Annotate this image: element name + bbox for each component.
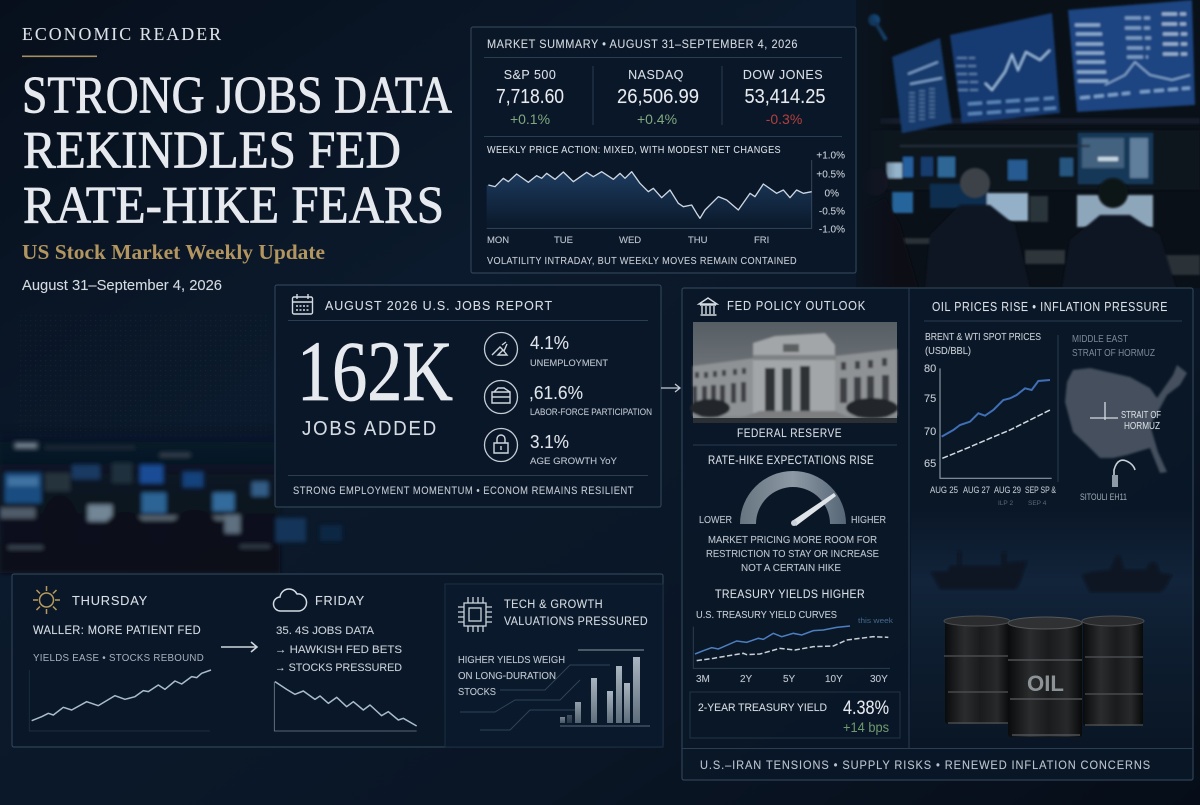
ship silhouettes bbox=[931, 551, 1172, 592]
title block bbox=[22, 24, 452, 294]
treasury x-axis labels: 2Y bbox=[740, 674, 753, 685]
tech note bbox=[458, 654, 565, 698]
big number: 162K jobs added bbox=[297, 323, 453, 440]
chart x-axis labels: FRI bbox=[754, 235, 769, 246]
index: S&P 500: +0.1% bbox=[510, 111, 550, 127]
tech heading: VALUATIONS PRESSURED bbox=[504, 616, 648, 628]
index: Dow Jones: DOW JONES bbox=[743, 68, 823, 82]
gauge: rate-hike expectations: LOWER bbox=[699, 515, 732, 526]
headline bbox=[22, 66, 452, 234]
stat: unemployment bbox=[484, 332, 608, 369]
callout: 2-year treasury yield: 4.38% bbox=[843, 698, 889, 719]
background: world map texture bbox=[20, 315, 270, 440]
oil y-axis labels: 70 bbox=[924, 426, 936, 438]
line chart: weekly price action bbox=[487, 160, 812, 228]
market pricing note: NOT A CERTAIN HIKE bbox=[741, 562, 841, 574]
treasury x-axis labels bbox=[696, 674, 888, 685]
index: S&P 500 bbox=[496, 68, 564, 127]
chart y-axis labels bbox=[816, 150, 845, 236]
oil barrels bbox=[944, 616, 1144, 737]
date: August 31–September 4, 2026 bbox=[22, 277, 222, 294]
map: strait of hormuz bbox=[1065, 365, 1187, 502]
circuit lines bbox=[460, 665, 610, 730]
arrow: jobs to fed bbox=[661, 384, 680, 392]
bar chart: tech valuations bbox=[560, 650, 650, 726]
panel: thursday, friday and tech bbox=[12, 574, 663, 747]
panel: jobs report bbox=[275, 285, 661, 507]
background: trading floor photo, upper right bbox=[856, 0, 1200, 288]
tech heading bbox=[504, 599, 648, 628]
market pricing note: MARKET PRICING MORE ROOM FOR bbox=[708, 534, 877, 546]
treasury x-axis labels: 10Y bbox=[825, 674, 843, 685]
map title: MIDDLE EAST bbox=[1072, 333, 1128, 345]
tech heading: TECH & GROWTH bbox=[504, 599, 603, 611]
panel: fed and oil outer frame bbox=[682, 288, 1193, 780]
callout: 2-year treasury yield bbox=[690, 692, 900, 738]
oil x-axis labels: AUG 29 bbox=[994, 485, 1021, 496]
oil heading: OIL PRICES RISE • INFLATION PRESSURE bbox=[932, 300, 1168, 314]
friday notes: → STOCKS PRESSURED bbox=[275, 662, 402, 674]
gauge: rate-hike expectations: HIGHER bbox=[851, 515, 886, 526]
panel: fed policy outlook bbox=[690, 298, 900, 738]
index: Dow Jones bbox=[743, 68, 826, 127]
friday heading: FRIDAY bbox=[315, 593, 365, 608]
stat: wage growth: AGE GROWTH YoY bbox=[530, 456, 618, 467]
map: strait of hormuz: SITOULI EH11 bbox=[1080, 492, 1127, 502]
chart y-axis labels: 0% bbox=[825, 188, 839, 200]
market pricing note: RESTRICTION TO STAY OR INCREASE bbox=[706, 548, 879, 560]
index: NASDAQ: +0.4% bbox=[637, 111, 677, 127]
thursday note: YIELDS EASE • STOCKS REBOUND bbox=[33, 652, 204, 664]
oil x-axis labels: ILP 2 bbox=[998, 500, 1013, 507]
market summary heading: MARKET SUMMARY • AUGUST 31–SEPTEMBER 4, 2026 bbox=[487, 37, 798, 51]
fed heading: FED POLICY OUTLOOK bbox=[727, 298, 866, 313]
friday notes: 35. 4S JOBS DATA bbox=[276, 625, 375, 637]
line chart: treasury yield curves bbox=[693, 626, 890, 668]
chart y-axis labels: +0.5% bbox=[816, 170, 845, 180]
subtitle: US Stock Market Weekly Update bbox=[22, 240, 325, 264]
oil chart title: BRENT & WTI SPOT PRICES bbox=[925, 331, 1041, 343]
thursday heading: THURSDAY bbox=[72, 593, 148, 608]
oil y-axis labels bbox=[924, 363, 936, 470]
index: NASDAQ bbox=[617, 68, 699, 127]
oil x-axis labels: AUG 27 bbox=[963, 485, 990, 496]
oil x-axis labels: AUG 25 bbox=[930, 485, 958, 496]
market pricing note bbox=[706, 534, 879, 574]
treasury heading: TREASURY YIELDS HIGHER bbox=[715, 589, 865, 601]
gauge: rate-hike expectations bbox=[699, 471, 886, 526]
treasury chart title: U.S. TREASURY YIELD CURVES bbox=[696, 609, 837, 621]
map title bbox=[1072, 333, 1155, 359]
tech note: STOCKS bbox=[458, 686, 496, 698]
stat: wage growth: 3.1% bbox=[530, 432, 569, 452]
oil chart title: (USD/BBL) bbox=[925, 345, 971, 357]
icon: sun bbox=[33, 586, 60, 614]
index: S&P 500: 7,718.60 bbox=[496, 86, 564, 108]
big number: 162K jobs added: 162K bbox=[297, 323, 453, 419]
stat: unemployment: UNEMPLOYMENT bbox=[530, 358, 608, 369]
oil barrels: OIL bbox=[1027, 671, 1064, 696]
stat: unemployment: 4.1% bbox=[530, 333, 569, 353]
panel: tech and growth bbox=[445, 584, 663, 747]
stat: labor-force participation bbox=[484, 380, 652, 418]
icon: federal building bbox=[699, 298, 717, 315]
chart y-axis labels: -1.0% bbox=[819, 224, 845, 236]
callout: 2-year treasury yield: +14 bps bbox=[843, 720, 889, 735]
oil x-axis labels: SEP 4 bbox=[1028, 500, 1047, 507]
friday notes: → HAWKISH FED BETS bbox=[275, 644, 402, 656]
arrow: thursday to friday bbox=[221, 642, 257, 652]
line chart: friday decline bbox=[274, 682, 417, 731]
chart x-axis labels: TUE bbox=[554, 235, 573, 246]
index: Dow Jones: 53,414.25 bbox=[744, 86, 826, 108]
legend: this week: this week bbox=[858, 616, 893, 625]
oil y-axis labels: 80 bbox=[924, 363, 936, 375]
outlook footer: U.S.–IRAN TENSIONS • SUPPLY RISKS • RENEWED INFLATION CONCERNS bbox=[700, 758, 1151, 772]
big number: 162K jobs added: JOBS ADDED bbox=[302, 418, 438, 440]
friday notes bbox=[275, 625, 402, 674]
callout: 2-year treasury yield: 2-YEAR TREASURY YIELD bbox=[698, 702, 827, 714]
jobs report heading: AUGUST 2026 U.S. JOBS REPORT bbox=[325, 298, 553, 313]
headline: STRONG JOBS DATA bbox=[22, 66, 452, 124]
chart y-axis labels: +1.0% bbox=[816, 150, 845, 162]
chart y-axis labels: -0.5% bbox=[819, 206, 845, 218]
rate-hike heading: RATE-HIKE EXPECTATIONS RISE bbox=[708, 455, 874, 467]
tech note: ON LONG-DURATION bbox=[458, 670, 556, 682]
index: NASDAQ: NASDAQ bbox=[628, 68, 684, 82]
photo: federal reserve building bbox=[690, 322, 898, 423]
brand label: ECONOMIC READER bbox=[22, 24, 223, 44]
index: Dow Jones: -0.3% bbox=[766, 111, 802, 127]
chart x-axis labels: MON bbox=[487, 235, 509, 246]
treasury x-axis labels: 3M bbox=[696, 674, 710, 685]
stat: wage growth bbox=[484, 428, 618, 467]
stat: labor-force participation: LABOR-FORCE PARTICIPATION bbox=[530, 407, 652, 418]
index: S&P 500: S&P 500 bbox=[504, 68, 556, 82]
chart x-axis labels: WED bbox=[619, 235, 641, 246]
headline: RATE-HIKE FEARS bbox=[23, 176, 444, 234]
oil x-axis labels: SEP SP & bbox=[1025, 485, 1056, 496]
stat: labor-force participation: ,61.6% bbox=[529, 383, 583, 403]
icon: calendar bbox=[292, 294, 312, 314]
icon: cloud bbox=[273, 589, 307, 611]
chart x-axis labels: THU bbox=[688, 235, 708, 246]
volatility note: VOLATILITY INTRADAY, BUT WEEKLY MOVES REMAIN CONTAINED bbox=[487, 256, 797, 267]
index: NASDAQ: 26,506.99 bbox=[617, 86, 699, 108]
jobs report footer: STRONG EMPLOYMENT MOMENTUM • ECONOM REMAINS RESILIENT bbox=[293, 485, 634, 497]
treasury x-axis labels: 30Y bbox=[870, 674, 888, 685]
oil x-axis labels bbox=[930, 485, 1056, 507]
panel: market summary bbox=[471, 27, 856, 273]
thursday headline: WALLER: MORE PATIENT FED bbox=[33, 625, 201, 637]
gold rule bbox=[22, 56, 97, 57]
oil photo backdrop bbox=[911, 510, 1192, 747]
headline: REKINDLES FED bbox=[23, 122, 401, 180]
line chart: thursday rebound bbox=[29, 670, 211, 731]
tech note: HIGHER YIELDS WEIGH bbox=[458, 654, 565, 666]
map: strait of hormuz: STRAIT OF bbox=[1121, 410, 1161, 421]
photo caption: FEDERAL RESERVE bbox=[737, 428, 842, 440]
weekly price action caption: WEEKLY PRICE ACTION: MIXED, WITH MODEST NET CHANGES bbox=[487, 145, 781, 156]
line chart: brent and wti bbox=[940, 368, 1052, 478]
panel: oil prices bbox=[911, 300, 1192, 747]
icon: microchip bbox=[458, 597, 492, 632]
oil y-axis labels: 75 bbox=[924, 393, 936, 405]
map: strait of hormuz: HORMUZ bbox=[1124, 421, 1160, 432]
oil chart title bbox=[925, 331, 1041, 357]
chart x-axis labels bbox=[487, 235, 769, 246]
treasury x-axis labels: 5Y bbox=[783, 674, 796, 685]
oil y-axis labels: 65 bbox=[924, 458, 936, 470]
map title: STRAIT OF HORMUZ bbox=[1072, 347, 1155, 359]
background: trading floor, lower left bbox=[0, 425, 342, 573]
